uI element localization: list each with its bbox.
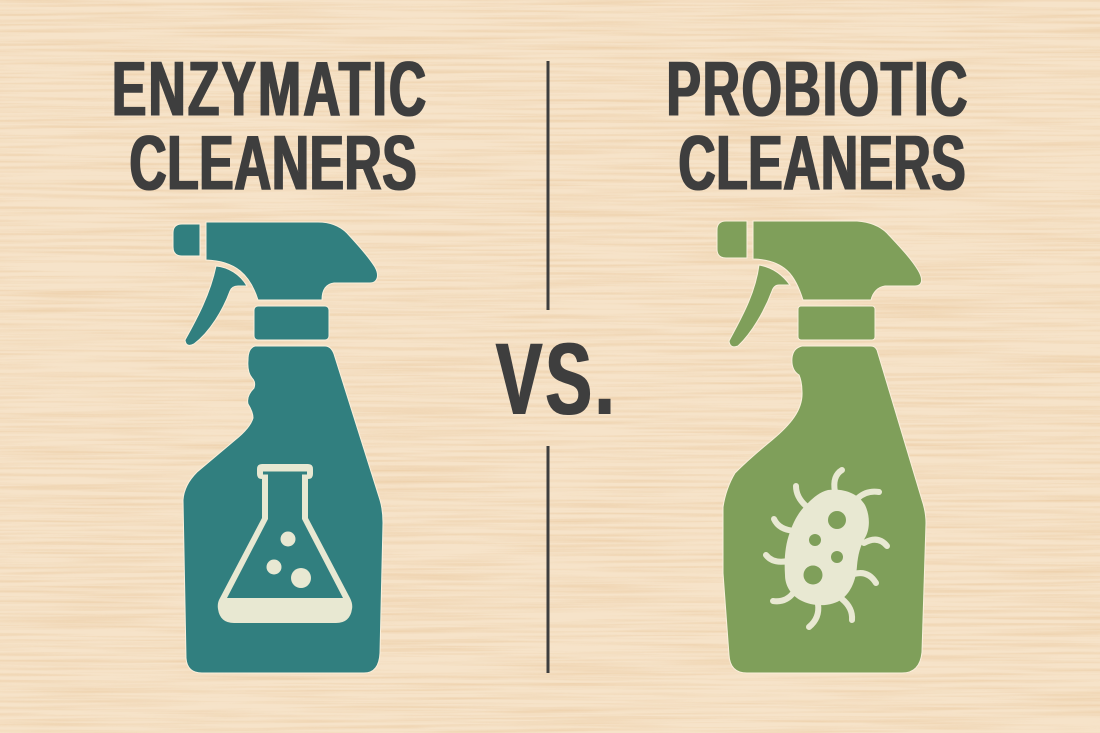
nozzle [173, 224, 200, 256]
title: probiotic cleaners [666, 46, 967, 207]
bottle body [183, 346, 383, 673]
bacterium spots [804, 511, 846, 584]
title: probiotic cleaners: CLEANERS [678, 120, 966, 207]
teal spray bottle [173, 222, 383, 673]
bacterium legs [766, 470, 887, 627]
icon: bacterium [766, 470, 887, 627]
title: enzymatic cleaners [112, 46, 426, 207]
title: probiotic cleaners: PROBIOTIC [666, 46, 967, 133]
green spray bottle [717, 221, 926, 673]
trigger [185, 266, 247, 345]
flask interior [227, 472, 343, 598]
title: enzymatic cleaners: CLEANERS [130, 120, 417, 207]
nozzle [717, 221, 747, 258]
title: enzymatic cleaners: ENZYMATIC [112, 46, 426, 133]
bubbles [266, 532, 311, 588]
flask outline [218, 464, 352, 623]
versus label: VS. [496, 323, 614, 436]
icon: flask [218, 464, 352, 623]
collar [254, 306, 329, 340]
bacterium body [785, 490, 869, 605]
bottle body [723, 346, 926, 673]
collar [798, 306, 875, 340]
spray head [206, 222, 377, 300]
trigger [729, 265, 790, 347]
spray head [753, 221, 922, 300]
centre divider [546, 61, 550, 673]
